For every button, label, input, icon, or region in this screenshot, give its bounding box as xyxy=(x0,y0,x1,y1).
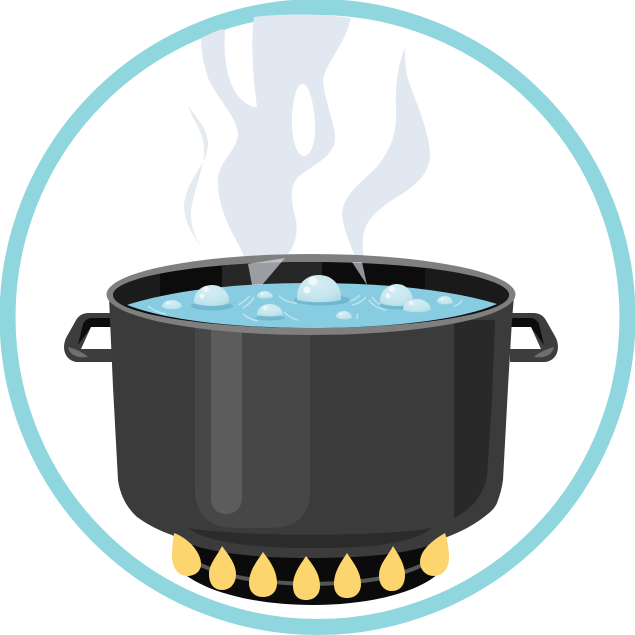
steam: left thin wisp xyxy=(184,105,214,262)
bubble: far left xyxy=(162,300,182,309)
flame 6 xyxy=(379,546,405,591)
handle: right xyxy=(510,313,558,362)
pot rim xyxy=(106,254,516,335)
pot body xyxy=(109,296,514,558)
steam: central plume xyxy=(201,14,351,287)
bubble: large centre xyxy=(297,275,341,302)
bubbles xyxy=(162,275,453,320)
bubble: lower centre xyxy=(257,304,283,316)
water xyxy=(127,283,497,328)
burner: stove base with grate xyxy=(176,545,446,605)
bubble: small upper xyxy=(257,291,273,298)
bubble: small lower xyxy=(336,311,352,319)
steam overlay: rising from water over the pot interior xyxy=(248,258,367,285)
flame 2 xyxy=(209,546,236,590)
bubble: small right xyxy=(437,296,453,304)
flame 5 xyxy=(334,553,361,598)
handle: left xyxy=(64,313,112,362)
pot interior xyxy=(113,262,509,328)
steam: right plume xyxy=(342,48,430,287)
water ripples xyxy=(148,295,462,321)
body shading: bottom dark crescent xyxy=(188,528,432,548)
flame 4 xyxy=(293,556,320,600)
bubble: right xyxy=(380,284,413,306)
flame 7 xyxy=(420,533,449,576)
bubble: right front xyxy=(403,299,431,312)
body shading: bright strip xyxy=(211,320,242,514)
flame 1 xyxy=(172,533,201,576)
flames xyxy=(172,533,449,600)
steam xyxy=(184,14,430,287)
bubble highlights xyxy=(166,276,443,315)
body shading: right dark band xyxy=(454,320,495,518)
flame 3 xyxy=(249,552,277,597)
bubble shadows xyxy=(191,294,420,320)
body shading: wide highlight xyxy=(195,320,310,528)
bubble: left xyxy=(194,285,229,306)
